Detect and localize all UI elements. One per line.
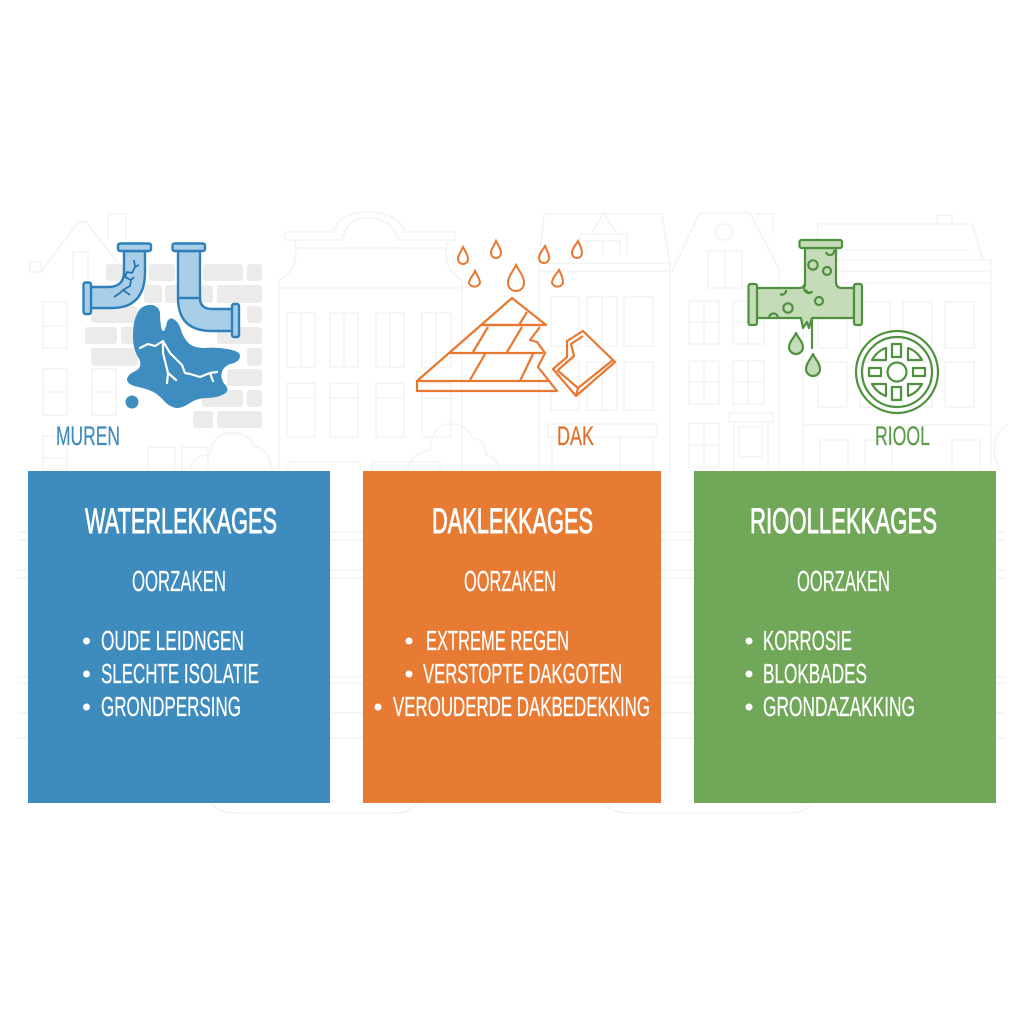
panel: waterlekkages: GRONDPERSING [101,691,241,722]
icon: broken roof [417,298,557,391]
panel: rioollekkages: BLOKBADES [763,658,867,689]
icon: corroded sewer pipe [748,240,862,376]
panel: daklekkages: VEROUDERDE DAKBEDEKKING [393,691,650,722]
panel: rioollekkages [694,471,996,803]
icon: water puddle [126,305,240,408]
panel: rioollekkages: GRONDAZAKKING [763,691,915,722]
icon: manhole cover [856,331,938,413]
panel: waterlekkages: OORZAKEN [132,566,226,598]
panel: daklekkages: OORZAKEN [464,566,556,598]
panel: waterlekkages: OUDE LEIDNGEN [101,625,244,656]
icon: brick wall [85,264,262,428]
panel: daklekkages: DAKLEKKAGES [432,502,593,541]
panel: daklekkages [363,471,661,803]
label: dak: DAK [557,421,594,451]
icon: broken roof tile [553,331,615,396]
panel: daklekkages: VERSTOPTE DAKGOTEN [423,658,622,689]
icon: rain drops [458,241,582,291]
label: muren: MUREN [56,421,120,451]
panel: rioollekkages: KORROSIE [763,625,852,656]
panel: daklekkages: EXTREME REGEN [426,625,569,656]
icon: right pipe [172,244,239,337]
label: riool: RIOOL [875,421,930,451]
panel: waterlekkages [28,471,330,803]
icon: cracked left pipe [84,244,151,314]
panel: waterlekkages: SLECHTE ISOLATIE [101,658,259,689]
panel: waterlekkages: WATERLEKKAGES [85,502,277,541]
background: canal house outlines [18,212,1008,813]
panel: rioollekkages: OORZAKEN [797,566,890,598]
